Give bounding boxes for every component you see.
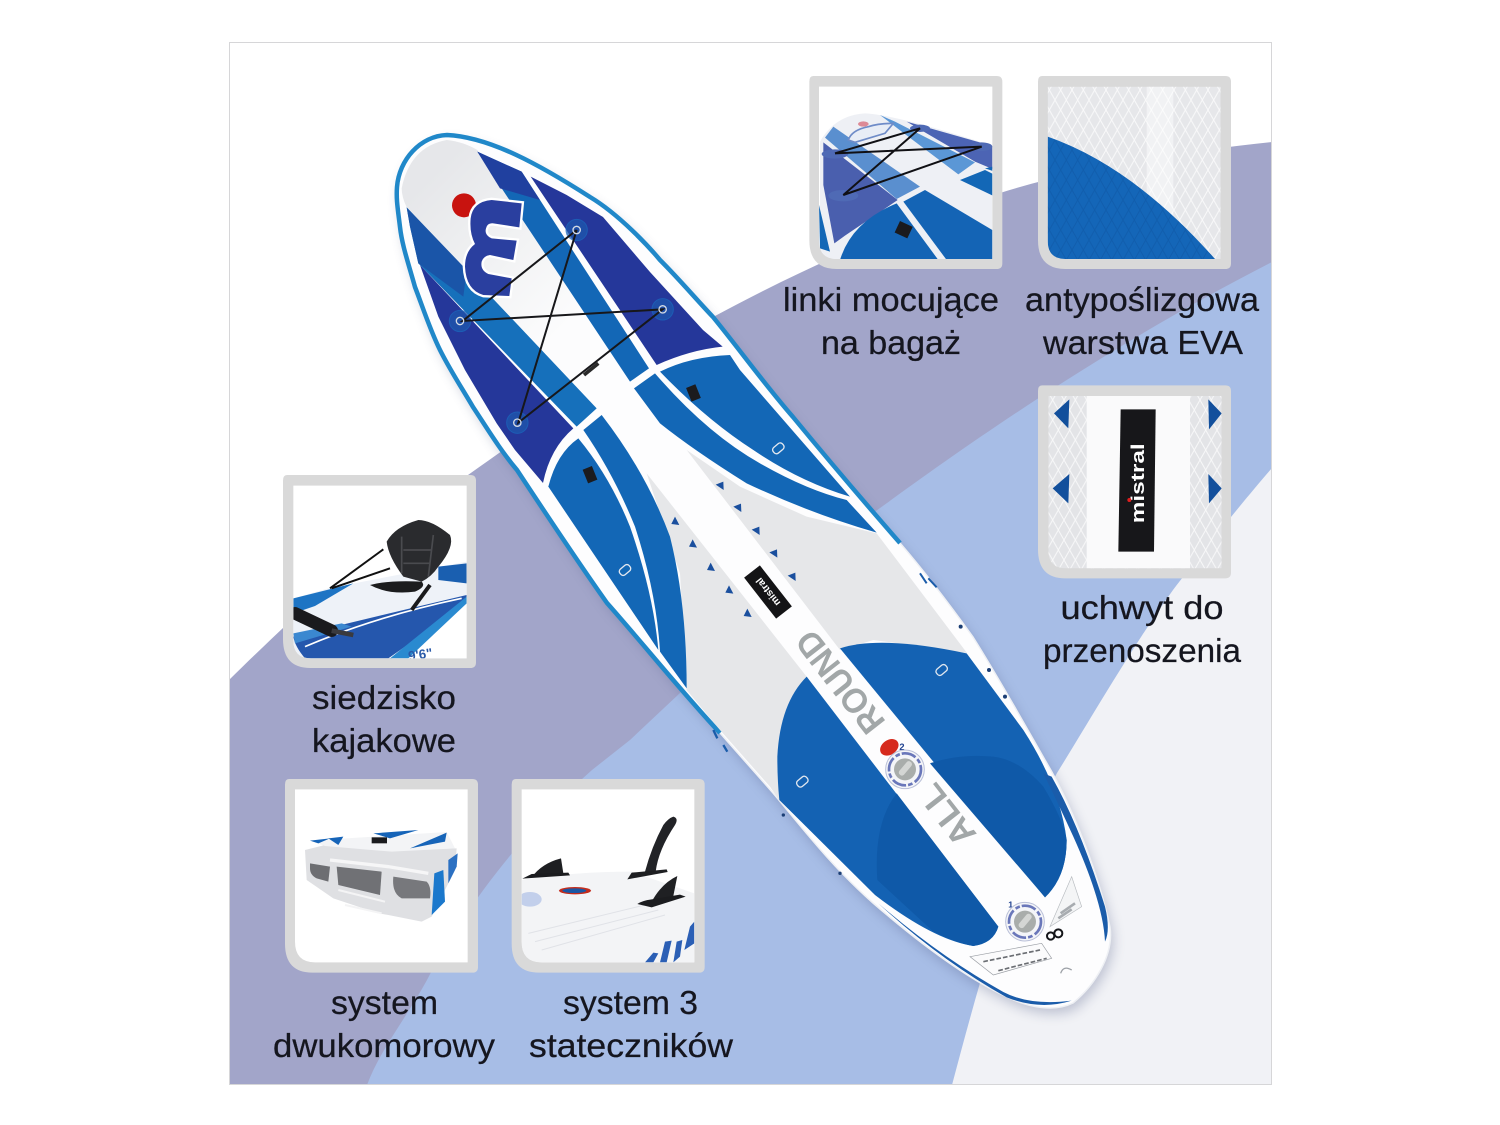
thumbnail: antypoślizgowa warstwa EVA xyxy=(1038,76,1231,269)
caption: linki mocujące na bagaż: na bagaż xyxy=(821,324,961,361)
caption: uchwyt do przenoszenia: przenoszenia xyxy=(1043,632,1242,669)
ALL ROUND lettering xyxy=(788,622,984,853)
caption: linki mocujące na bagaż xyxy=(783,281,999,361)
thumbnail: uchwyt do przenoszenia: mistral xyxy=(1127,443,1148,523)
nose graphics xyxy=(407,152,723,483)
caption: system dwukomorowy: dwukomorowy xyxy=(273,1027,496,1064)
logo xyxy=(452,193,522,296)
caption: antypoślizgowa warstwa EVA: antypoślizgowa xyxy=(1025,281,1260,318)
ALL ROUND lettering: ROUND xyxy=(788,622,893,741)
upper stripe xyxy=(477,152,649,382)
caption: siedzisko kajakowe: siedzisko xyxy=(312,679,456,716)
ALL ROUND lettering: ALL xyxy=(911,776,984,853)
thumbnail: system dwukomorowy xyxy=(285,779,478,973)
rail marks xyxy=(920,573,937,587)
spec labels xyxy=(970,877,1082,975)
rear pads xyxy=(777,677,998,946)
caption: system 3 stateczników xyxy=(529,984,733,1064)
caption: uchwyt do przenoszenia: uchwyt do xyxy=(1060,589,1224,626)
lower stripe xyxy=(407,207,597,427)
handle patches xyxy=(583,384,785,577)
caption: system dwukomorowy: system xyxy=(331,984,438,1021)
thumbnail: siedzisko kajakowe: 9'6" xyxy=(407,645,433,664)
tail rim xyxy=(1043,773,1108,942)
thumbnail: uchwyt do przenoszenia xyxy=(1038,385,1231,578)
caption: antypoślizgowa warstwa EVA xyxy=(1025,281,1260,361)
traction triangles xyxy=(671,482,796,617)
lower dark panel xyxy=(420,265,573,483)
deck pads mid xyxy=(548,355,967,800)
valve 2: 2 xyxy=(899,742,905,752)
thumbnail: system 3 stateczników xyxy=(512,779,705,973)
nose light area xyxy=(402,140,590,400)
paddle board xyxy=(397,135,1114,1014)
caption: uchwyt do przenoszenia xyxy=(1043,589,1242,669)
grip rings xyxy=(935,663,949,677)
caption: linki mocujące na bagaż: linki mocujące xyxy=(783,281,999,318)
valve 2 xyxy=(877,736,924,789)
caption: system dwukomorowy xyxy=(273,984,496,1064)
thumbnail: linki mocujące na bagaż xyxy=(809,76,1002,269)
tail graphics xyxy=(713,625,1108,1005)
bungee cords xyxy=(449,219,673,433)
caption: siedzisko kajakowe: kajakowe xyxy=(312,722,456,759)
centre stripe mistral patch xyxy=(744,565,792,619)
valve 1: 1 xyxy=(1008,899,1013,909)
thumbnail: siedzisko kajakowe xyxy=(283,475,476,668)
caption: system 3 stateczników: stateczników xyxy=(529,1027,733,1064)
rail marks xyxy=(782,625,1007,875)
caption: system 3 stateczników: system 3 xyxy=(563,984,698,1021)
caption: antypoślizgowa warstwa EVA: warstwa EVA xyxy=(1042,324,1243,361)
caption: siedzisko kajakowe xyxy=(312,679,456,759)
upper dark panel xyxy=(531,177,723,365)
centre stripe mistral patch: mistral xyxy=(754,575,783,608)
valve 1 xyxy=(1006,899,1044,941)
background panel xyxy=(229,42,1272,1085)
